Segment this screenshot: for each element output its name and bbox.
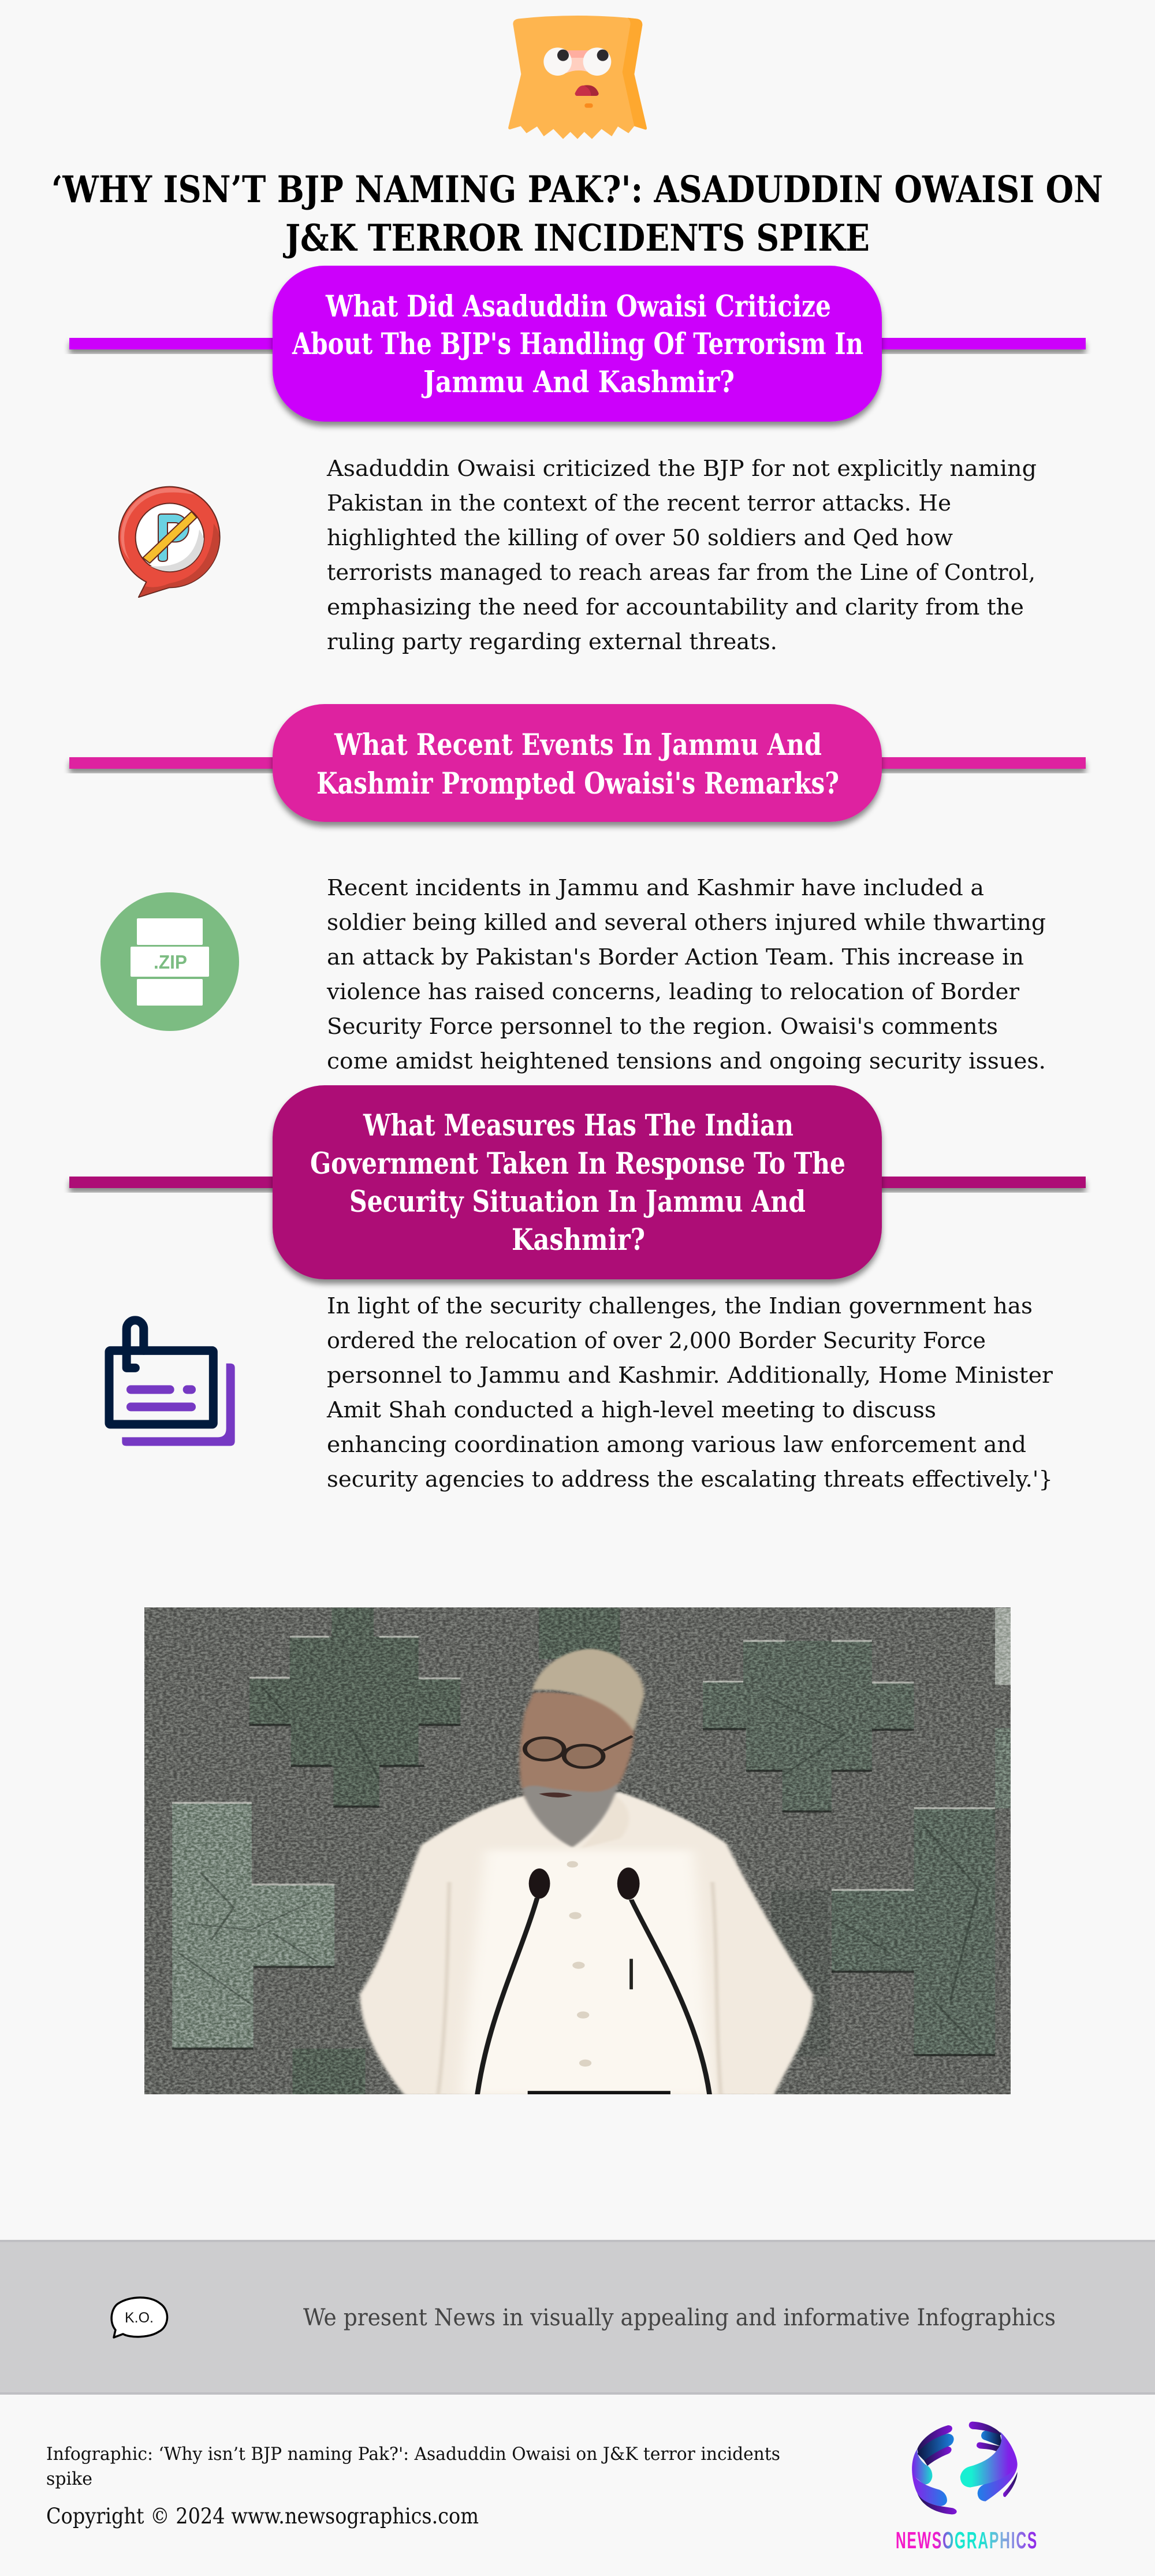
heading bar 3: Government Taken In Response To The (310, 1146, 845, 1181)
icon: zip file (100, 892, 239, 1031)
panel: Owaisi criticism (69, 266, 1086, 654)
body text 1: highlighted the killing of over 50 soldiers and Qed how (327, 525, 953, 550)
body text 3: ordered the relocation of over 2,000 Border Security Force (327, 1328, 986, 1353)
footer credit text: Copyright © 2024 www.newsographics.com (46, 2504, 479, 2529)
body text 3 (326, 1293, 1053, 1492)
body text 2: Security Force personnel to the region. Owaisi's comments (327, 1014, 998, 1039)
body text 1: Asaduddin Owaisi criticized the BJP for not explicitly naming (326, 456, 1037, 481)
heading bar 2: What Recent Events In Jammu And (334, 728, 822, 762)
body text 2 (326, 875, 1046, 1074)
body text 1: emphasizing the need for accountability and clarity from the (327, 594, 1024, 620)
logo wordmark: NEWSOGRAPHICS (896, 2527, 1038, 2554)
icon: zip file: .ZIP (154, 951, 187, 973)
logo: Newsographics (896, 2422, 1038, 2554)
heading bar 3: Security Situation In Jammu And (349, 1185, 806, 1219)
body text 1: Pakistan in the context of the recent terror attacks. He (327, 490, 951, 516)
body text 2: an attack by Pakistan's Border Action Team. This increase in (327, 944, 1024, 970)
icon: K.O. speech bubble: K.O. (125, 2310, 154, 2326)
title: J&K TERROR INCIDENTS SPIKE (283, 217, 870, 260)
body text 1: terrorists managed to reach areas far from the Line of Control, (327, 560, 1035, 585)
icon: K.O. speech bubble (111, 2298, 167, 2337)
heading bar 1: What Did Asaduddin Owaisi Criticize (325, 289, 831, 324)
heading bar 3: What Measures Has The Indian (363, 1108, 793, 1143)
panel: government measures (69, 1085, 1086, 1492)
icon: orange paper bag face (508, 16, 647, 139)
footer credit text (46, 2444, 780, 2529)
tagline: We present News in visually appealing and informative Infographics (303, 2305, 1056, 2331)
body text 3: In light of the security challenges, the Indian government has (327, 1293, 1033, 1319)
heading bar 3 (69, 1085, 1086, 1279)
heading bar 3: Kashmir? (512, 1223, 645, 1257)
body text 1: ruling party regarding external threats. (327, 629, 777, 654)
body text 3: Amit Shah conducted a high-level meeting to discuss (326, 1397, 936, 1423)
body text 2: Recent incidents in Jammu and Kashmir have included a (327, 875, 984, 900)
heading bar 1: About The BJP's Handling Of Terrorism In (292, 327, 863, 362)
footer band (0, 2240, 1155, 2395)
panel: recent events (69, 704, 1086, 1074)
heading bar 2: Kashmir Prompted Owaisi's Remarks? (316, 766, 839, 801)
body text 2: come amidst heightened tensions and ongoing security issues. (327, 1048, 1046, 1074)
body text 3: security agencies to address the escalating threats effectively.'} (327, 1466, 1053, 1492)
heading bar 2 (69, 704, 1086, 822)
body text 3: enhancing coordination among various law enforcement and (327, 1432, 1026, 1457)
body text 2: violence has raised concerns, leading to relocation of Border (326, 979, 1020, 1004)
logo mark (912, 2422, 1018, 2514)
footer credit text: Infographic: ‘Why isn’t BJP naming Pak?': Asaduddin Owaisi on J&K terror incidents (46, 2444, 780, 2465)
photo: Asaduddin Owaisi speaking at microphones (144, 1606, 1012, 2095)
icon: no parking speech bubble (119, 487, 220, 597)
footer credit text: spike (46, 2469, 92, 2489)
body text 1 (326, 456, 1037, 654)
heading bar 1 (69, 266, 1086, 422)
heading bar 1: Jammu And Kashmir? (422, 365, 735, 400)
icon: clipped note (109, 1320, 235, 1446)
body text 3: personnel to Jammu and Kashmir. Additionally, Home Minister (327, 1363, 1053, 1388)
title (51, 168, 1103, 260)
body text 2: soldier being killed and several others injured while thwarting (327, 910, 1046, 935)
